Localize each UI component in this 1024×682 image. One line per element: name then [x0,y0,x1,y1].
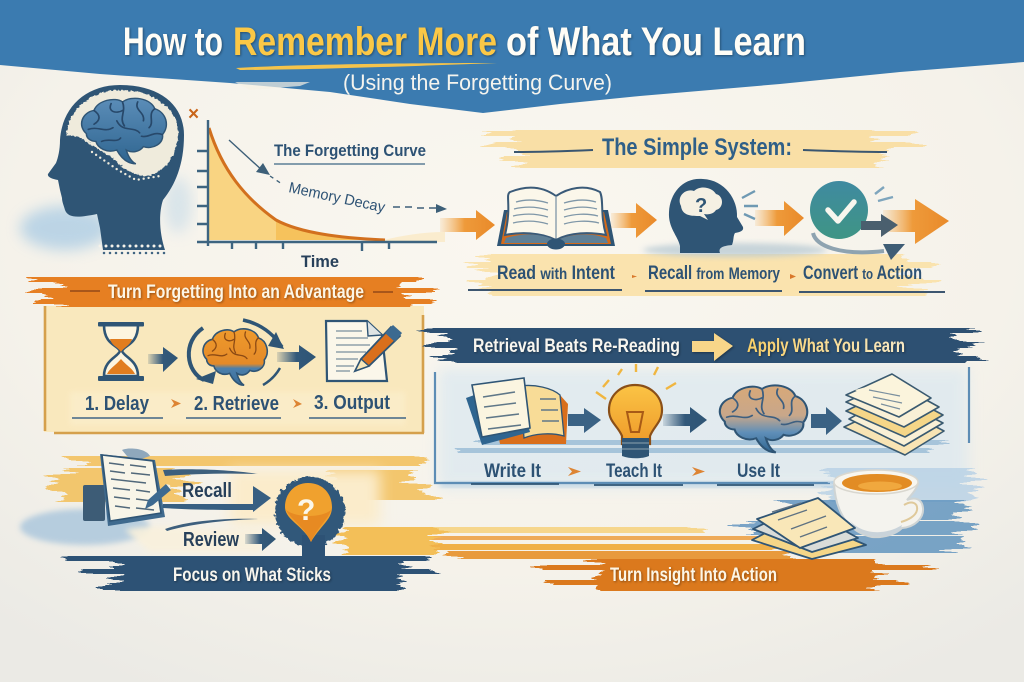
icon: paper stack [752,498,866,559]
heading band [430,328,981,363]
forgetting curve chart [188,104,447,271]
title: of What You Learn [506,20,806,64]
chevrons [568,467,705,476]
arrow to brain [148,347,178,372]
blue wash [830,468,970,502]
chart title: The Forgetting Curve [274,141,426,160]
arrow to bulb [568,408,601,433]
head with brain icon [20,85,192,253]
panel box [44,306,424,432]
dashed arrow [393,207,436,208]
review arrow [245,528,276,551]
icon: light bulb [596,364,676,458]
step labels: Convert to Action [803,263,922,284]
heading: Retrieval Beats Re-Reading [473,336,680,357]
heading band [540,559,925,591]
icon: coffee cup [834,470,923,537]
yellow wash [60,456,420,502]
yellow orange strokes [340,527,700,533]
label underlines [72,417,406,419]
curve fill [209,128,385,240]
title [123,20,806,64]
step labels: 1. Delay [85,393,150,415]
header banner [0,0,1024,113]
recall label: Recall [182,480,232,502]
icon: stack of papers [844,374,944,455]
chevrons [171,399,302,408]
decorative arrow strokes [163,469,258,476]
brain [82,98,166,164]
icon: head with question: ? [297,494,315,527]
heading: The Simple System: [602,134,792,161]
step labels: 2. Retrieve [194,393,279,415]
panel: turn forgetting into an advantage [30,277,430,433]
heading band [68,556,430,591]
step labels: Use It [737,461,781,482]
icon: brain with circular arrows [189,320,284,385]
review label: Review [183,529,239,551]
panel border [435,367,969,483]
big action arrow [883,199,949,244]
icon: head with question [275,477,345,559]
curve line [209,128,385,240]
heading [473,333,905,361]
arrow to check [755,201,804,236]
arrow into book [440,210,495,240]
recall arrow [163,486,271,512]
heading band [30,277,430,307]
icon: document and pencil [326,321,402,381]
icon: papers [466,378,568,445]
label underlines [468,290,945,292]
decay arrow [229,140,264,172]
heading: Turn Insight Into Action [610,565,777,586]
heading: Focus on What Sticks [173,565,331,586]
panel: the simple system [440,130,949,296]
arrow to brain [663,407,707,433]
heading band [478,130,923,168]
axes [197,120,437,251]
subtitle: (Using the Forgetting Curve) [343,70,612,95]
panel: focus on what sticks [20,448,440,591]
step labels: Write It [484,461,542,482]
arrow to output [277,345,316,370]
step labels [484,461,781,482]
step labels: Teach It [606,461,663,482]
small separators [632,274,796,279]
arrow to head [611,203,657,238]
lower band [462,254,932,296]
blue wash [20,509,150,545]
icon: head with question: ? [695,195,707,217]
title: How to [123,20,223,64]
title underline [236,63,497,70]
heading: Apply What You Learn [747,336,905,357]
axis label: Time [301,252,339,271]
blue wash [438,368,968,488]
icon: open book [497,188,615,250]
icon: notebook and pencil [83,448,171,526]
heading: Turn Forgetting Into an Advantage [108,282,364,303]
icon: check with arrows [810,181,905,260]
panel: turn insight into action [340,468,970,591]
arrow to stack [811,407,842,435]
step labels [85,392,390,415]
label underlines [471,484,814,485]
step labels: Read with Intent [497,263,616,284]
title: Remember More [233,20,497,64]
icon: head with question [669,179,758,253]
panel: retrieval beats re-reading [430,328,981,488]
axis marker: × [188,104,199,125]
step labels: Recall from Memory [648,263,780,284]
icon: hourglass [70,322,145,381]
icon: brain [720,385,807,452]
step labels [497,263,922,284]
memory decay label: Memory Decay [287,179,387,216]
step labels: 3. Output [314,392,390,414]
